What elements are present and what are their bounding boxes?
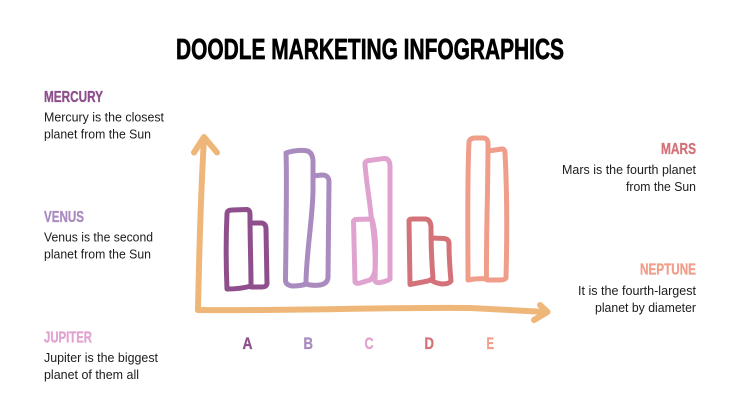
title: DOODLE MARKETING INFOGRAPHICS (176, 34, 564, 66)
chart: doodle bar chart (194, 137, 548, 353)
text block: Mars: MARS (661, 141, 696, 158)
bar labels: B (304, 334, 313, 353)
text block: Jupiter: Jupiter is the biggest (44, 351, 159, 365)
bar labels: D (424, 334, 434, 353)
text block: Neptune: It is the fourth-largest (578, 284, 697, 298)
text block: Mars (562, 141, 697, 194)
bars E (468, 138, 507, 280)
text block: Mercury (44, 89, 165, 142)
text block: Neptune (578, 262, 697, 315)
bars D (409, 219, 451, 284)
text block: Mercury: Mercury is the closest (44, 110, 165, 124)
text block: Mars: Mars is the fourth planet (562, 163, 697, 177)
text block: Jupiter: planet of them all (44, 368, 139, 382)
text block: Jupiter (44, 330, 159, 382)
bar labels: C (364, 334, 374, 353)
bars C (354, 158, 390, 283)
text block: Venus: VENUS (44, 209, 84, 226)
bar labels: E (486, 334, 494, 353)
text block: Mercury: MERCURY (44, 89, 103, 106)
text block: Venus: planet from the Sun (44, 248, 151, 262)
text block: Neptune: NEPTUNE (640, 262, 696, 278)
text block: Mercury: planet from the Sun (44, 128, 151, 142)
bars B (285, 150, 329, 286)
bars A (226, 210, 267, 289)
text block: Neptune: planet by diameter (595, 301, 696, 315)
y axis arrow (194, 137, 217, 310)
text block: Jupiter: JUPITER (44, 330, 92, 346)
text block: Venus (44, 209, 153, 262)
x axis arrow (198, 305, 548, 320)
bar labels (242, 334, 494, 353)
bar labels: A (242, 334, 252, 353)
text block: Mars: from the Sun (626, 180, 696, 194)
text block: Venus: Venus is the second (44, 230, 153, 244)
